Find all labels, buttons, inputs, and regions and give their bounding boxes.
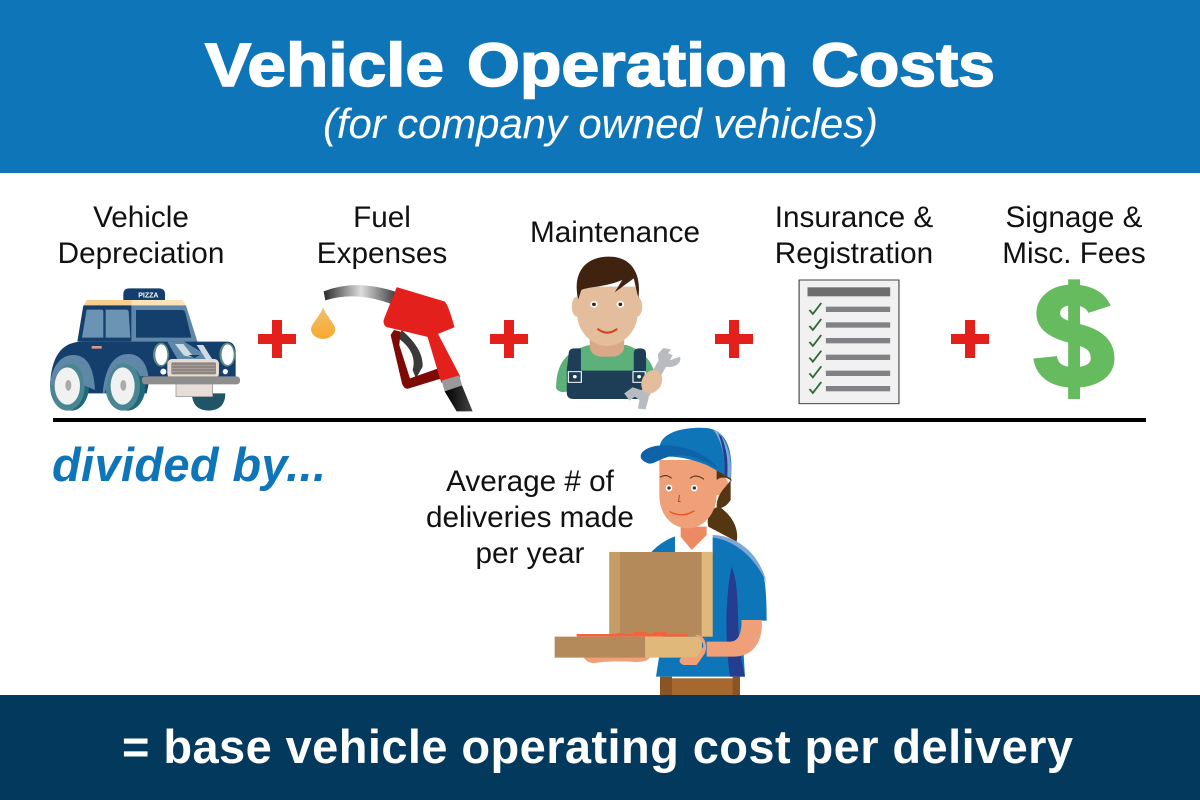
icon: delivery woman holding pizza box — [555, 428, 767, 695]
label: average deliveries per year: per year — [476, 537, 585, 570]
divided by text: divided by... — [52, 438, 326, 491]
label: maintenance: Maintenance — [530, 216, 700, 249]
label: average deliveries per year: Average # of — [446, 465, 615, 498]
label: insurance and registration — [775, 201, 933, 270]
label: average deliveries per year: deliveries made — [426, 501, 634, 534]
plus sign 2 — [490, 320, 528, 358]
label: signage and misc fees: Signage & — [1005, 201, 1143, 234]
footer formula text: = base vehicle operating cost per delivery — [122, 720, 1073, 773]
label: fuel expenses: Fuel — [353, 201, 411, 234]
label: signage and misc fees: Misc. Fees — [1002, 237, 1146, 270]
label: fuel expenses: Expenses — [317, 237, 447, 270]
label: signage and misc fees — [1002, 201, 1146, 270]
icon: mechanic with wrench — [556, 257, 680, 409]
header banner — [0, 0, 1200, 173]
subtitle: (for company owned vehicles) — [323, 100, 878, 147]
plus sign 1 — [258, 320, 296, 358]
label: vehicle depreciation: Depreciation — [58, 237, 224, 270]
title: Vehicle — [205, 31, 444, 99]
icon: fuel nozzle — [311, 285, 473, 411]
icon: dollar sign — [1045, 279, 1103, 399]
footer banner — [0, 695, 1200, 800]
plus sign 3 — [715, 320, 753, 358]
icon: checklist document — [799, 280, 899, 404]
plus sign 4 — [951, 320, 989, 358]
label: insurance and registration: Insurance & — [775, 201, 933, 234]
icon: pizza delivery car: PIZZA — [138, 292, 158, 299]
divider line — [53, 418, 1146, 422]
label: average deliveries per year — [426, 465, 634, 570]
label: vehicle depreciation — [58, 201, 224, 270]
title: Costs — [811, 31, 995, 99]
icon: pizza delivery car — [50, 288, 240, 411]
label: fuel expenses — [317, 201, 447, 270]
title — [205, 31, 995, 99]
title: Operation — [467, 31, 788, 99]
label: insurance and registration: Registration — [775, 237, 933, 270]
label: vehicle depreciation: Vehicle — [93, 201, 189, 234]
